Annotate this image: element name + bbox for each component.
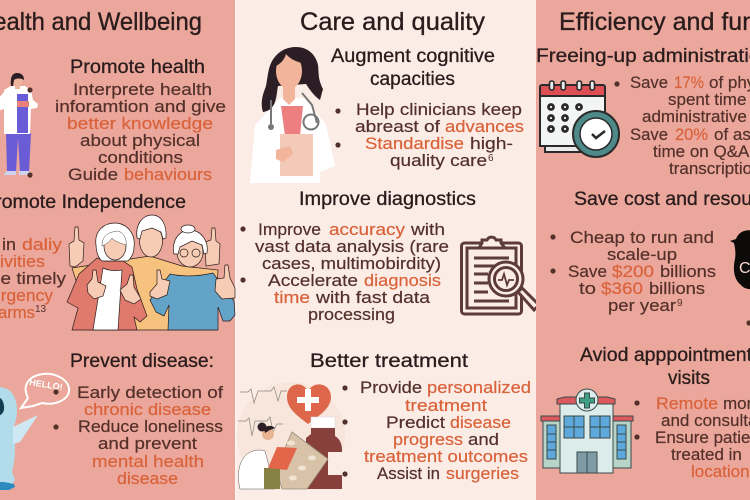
block: avoid appointment visits: treated in (671, 445, 742, 464)
panel: care and quality (237, 0, 539, 500)
block: better treatment: progress (393, 430, 463, 449)
icon: hospital building (541, 389, 633, 473)
block: better treatment: surgeries (446, 464, 519, 483)
block: augment cognitive capacities: high- (470, 134, 513, 153)
block: prevent disease (53, 351, 223, 488)
block: promote health: Guide (68, 165, 118, 184)
block: avoid appointment visits: Aviod apppointment (580, 345, 750, 366)
block: freeing-up administration: Save (630, 73, 668, 92)
block: freeing-up administration: 20% (675, 125, 708, 144)
block: augment cognitive capacities: abreast of (355, 117, 440, 136)
block: prevent disease: and prevent (98, 434, 197, 453)
block: prevent disease: chronic disease (84, 400, 211, 419)
block: freeing-up administration: 17% (674, 73, 704, 92)
block: improve diagnostics: processing (308, 305, 395, 324)
block: prevent disease: Reduce loneliness (78, 417, 223, 436)
block: augment cognitive capacities: Standardise (365, 134, 464, 153)
block: better treatment: personalized (427, 378, 531, 397)
block: save cost and resources: Save (568, 262, 607, 281)
block: better treatment: Provide (360, 378, 422, 397)
block: promote health: inforamtion and give (55, 97, 226, 116)
block: promote health: about physical (80, 131, 200, 150)
illustration: robot with speech bubble: HELLO! (29, 377, 63, 392)
block: better treatment: Assist in (377, 464, 440, 483)
block: improve diagnostics: Improve (258, 220, 321, 239)
block: better treatment: and (468, 430, 499, 449)
block: prevent disease: mental health (92, 452, 204, 471)
block: improve diagnostics: time (274, 288, 310, 307)
block: promote independence: daliy (22, 235, 63, 254)
block: prevent disease: disease (117, 469, 178, 488)
panel: health and wellbeing (0, 0, 235, 500)
block: save cost and resources: billions (649, 279, 705, 298)
block: improve diagnostics: accuracy (329, 220, 406, 239)
block: prevent disease: Early detection of (77, 383, 223, 402)
block: promote independence (0, 192, 186, 322)
block: save cost and resources (550, 189, 750, 315)
block: save cost and resources: Cheap to run and (570, 228, 714, 247)
block: augment cognitive capacities: capacities (370, 69, 455, 90)
block: better treatment: Predict (386, 413, 445, 432)
block: save cost and resources: billions (660, 262, 716, 281)
block: improve diagnostics: with fast data (315, 288, 431, 307)
block: freeing-up administration: time on Q&A (653, 142, 750, 161)
block: improve diagnostics: diagnosis (364, 271, 441, 290)
block: avoid appointment visits (580, 345, 750, 481)
block: freeing-up administration: administrative (642, 107, 747, 126)
block: better treatment: treatment (405, 396, 487, 415)
block: promote health: Interprete health (73, 80, 212, 99)
panel: efficiency and function (536, 0, 750, 500)
block: improve diagnostics: cases, multimobirdity) (262, 254, 441, 273)
block: freeing-up administration (536, 46, 750, 178)
block: promote health: Promote health (70, 57, 205, 78)
block: better treatment: disease (450, 413, 511, 432)
block: save cost and resources: to (579, 279, 596, 298)
icon: money bag silhouette (730, 230, 750, 289)
illustration: three seniors with thumbs up (67, 215, 235, 330)
block: improve diagnostics (240, 189, 476, 324)
block: save cost and resources: scale-up (607, 245, 677, 264)
block: improve diagnostics: Accelerate (268, 271, 358, 290)
illustration: robot with speech bubble (0, 374, 69, 490)
block: avoid appointment visits: Remote (656, 394, 718, 413)
block: promote health: better knowledge (67, 114, 213, 133)
block: better treatment (310, 351, 531, 483)
icon: clipboard with magnifier (462, 237, 539, 314)
block: freeing-up administration: Freeing-up administration (536, 46, 750, 67)
title: care and quality: Care and quality (300, 8, 486, 36)
illustration: doctor in white coat (0, 73, 38, 178)
block: augment cognitive capacities: advances (445, 117, 524, 136)
block: promote independence: 13 (35, 304, 47, 315)
illustration: female doctor with clipboard (250, 47, 335, 183)
block: promote independence: in (2, 235, 16, 254)
block: better treatment: treatment outcomes (364, 447, 528, 466)
block: avoid appointment visits: visits (668, 368, 710, 389)
block: improve diagnostics: Improve diagnostics (299, 189, 476, 210)
block: promote health: behaviours (124, 165, 212, 184)
block: save cost and resources: $200 (612, 262, 654, 281)
block: avoid appointment visits: location (691, 462, 750, 481)
block: augment cognitive capacities: Augment cognitive (331, 46, 495, 67)
block: augment cognitive capacities (331, 46, 524, 170)
block: better treatment: Better treatment (310, 351, 469, 372)
block: improve diagnostics: with (410, 220, 445, 239)
block: promote health: conditions (98, 148, 183, 167)
block: save cost and resources: $360 (601, 279, 643, 298)
block: prevent disease: Prevent disease: (70, 351, 214, 372)
block: save cost and resources: 9 (677, 298, 683, 309)
icon: calendar with clock (540, 81, 619, 157)
block: augment cognitive capacities: Help clinicians keep (356, 100, 522, 119)
block: augment cognitive capacities: quality care (390, 151, 487, 170)
block: promote health (55, 57, 226, 184)
block: freeing-up administration: Save (630, 125, 668, 144)
block: augment cognitive capacities: 6 (488, 153, 494, 164)
block: improve diagnostics: vast data analysis (rare (255, 237, 449, 256)
illustration: treatment, heart and medicine bottle (237, 382, 345, 490)
block: save cost and resources: per year (608, 296, 676, 315)
